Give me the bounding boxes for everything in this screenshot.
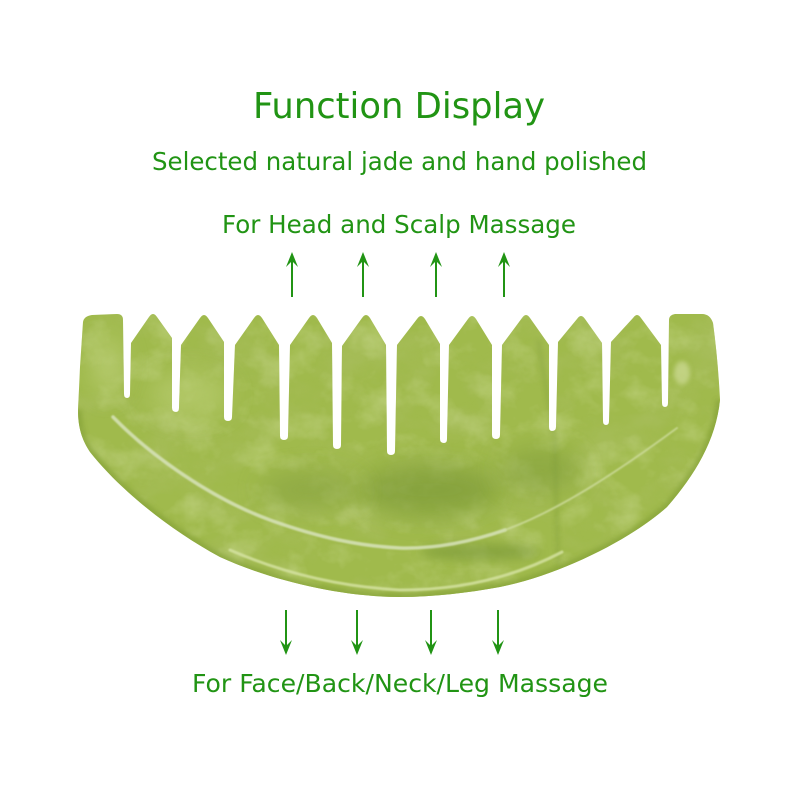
- bottom label: face, back, neck, leg massage: For Face/Back/Neck/Leg Massage: [192, 669, 608, 698]
- jade marbling texture: [70, 305, 730, 605]
- jade gua sha comb: [70, 305, 730, 605]
- subtitle: Selected natural jade and hand polished: [152, 147, 647, 176]
- down arrows: [280, 610, 504, 655]
- arrow down 3: [425, 610, 437, 655]
- polished inner groove highlight, left and centre: [113, 417, 505, 548]
- lower edge highlight: [230, 550, 562, 590]
- arrow down 2: [351, 610, 363, 655]
- arrow down 1: [280, 610, 292, 655]
- top label: head and scalp massage: For Head and Scalp Massage: [222, 210, 576, 239]
- dark veins: [542, 365, 559, 562]
- arrow up 4: [498, 252, 510, 297]
- arrow up 3: [430, 252, 442, 297]
- arrow down 4: [492, 610, 504, 655]
- infographic canvas: [78, 91, 720, 697]
- arrow up 2: [357, 252, 369, 297]
- polished inner groove highlight, right: [505, 428, 677, 530]
- comb body: [78, 314, 720, 597]
- darker rim along the curved edge: [78, 400, 720, 597]
- arrow up 1: [286, 252, 298, 297]
- title: Function Display: [253, 86, 545, 127]
- up arrows: [286, 252, 510, 297]
